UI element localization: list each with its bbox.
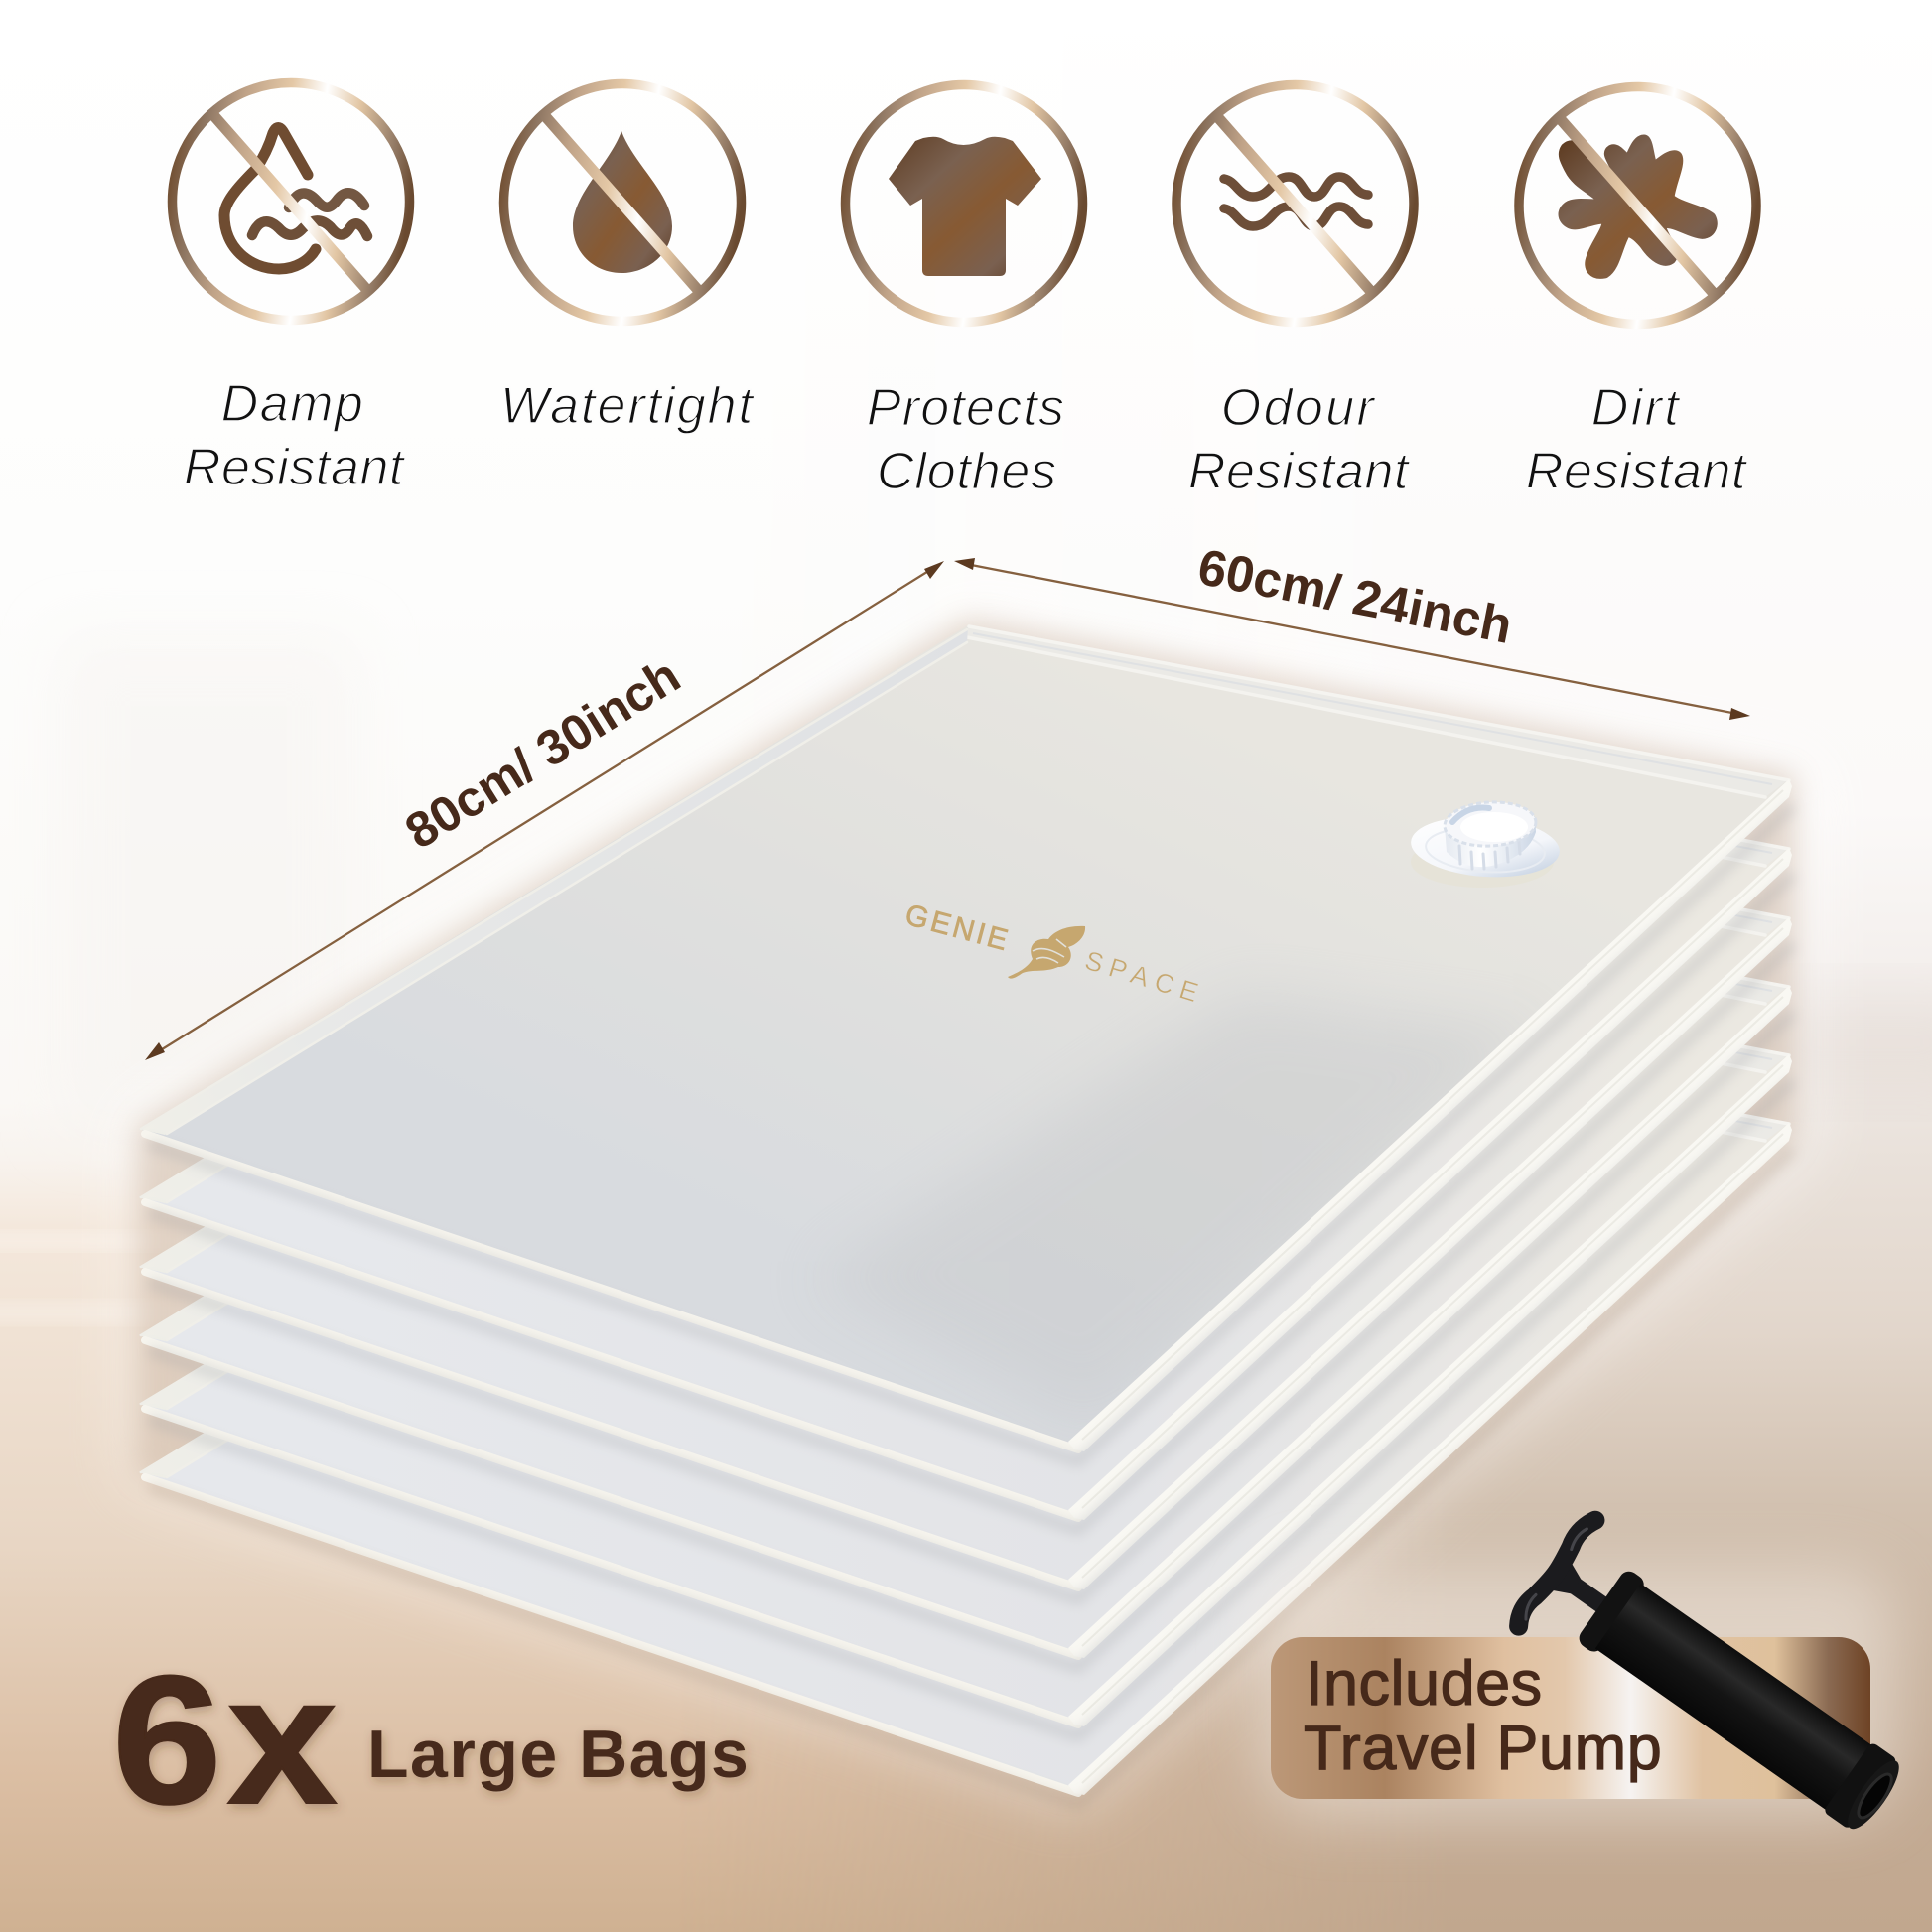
callout: includes travel pump: Travel Pump (1304, 1714, 1662, 1783)
icon: damp resistant (173, 83, 409, 320)
heading: 6x large bags: 6x (112, 1638, 343, 1842)
top bag (139, 625, 1793, 1461)
feature label: protects clothes: Clothes (877, 443, 1057, 500)
feature label: watertight: Watertight (500, 377, 756, 435)
icon: watertight (504, 83, 741, 322)
bag 3 (139, 763, 1793, 1599)
feature label: odour resistant: Resistant (1188, 443, 1411, 500)
icon: odour resistant (1176, 85, 1414, 322)
bag logo (901, 898, 1208, 1010)
glow behind pump callout (1261, 1569, 1896, 1817)
background (0, 649, 1932, 1932)
bag 2 (139, 694, 1793, 1530)
callout: includes travel pump (1271, 1637, 1870, 1799)
heading: 6x large bags (112, 1638, 750, 1842)
arrow: length dimension (145, 561, 944, 1060)
bag stack: lower five bags (139, 694, 1793, 1805)
glow behind bag stack (129, 606, 1817, 1807)
feature label: odour resistant (1188, 379, 1411, 500)
callout: includes travel pump: Includes (1306, 1649, 1543, 1719)
feature label: protects clothes (867, 379, 1065, 500)
feature label: dirt resistant (1526, 379, 1748, 500)
travel pump (1513, 1515, 1921, 1856)
bag logo: SPACE (1081, 945, 1208, 1010)
feature label: dirt resistant: Resistant (1526, 443, 1748, 500)
feature label: protects clothes: Protects (867, 379, 1065, 437)
icon: protects clothes (846, 85, 1082, 322)
feature label: dirt resistant: Dirt (1591, 379, 1681, 437)
feature label: odour resistant: Odour (1221, 379, 1377, 437)
label: 80cm / 30inch: 80cm/ 30inch (396, 647, 690, 860)
bag 5 (139, 900, 1793, 1736)
heading: 6x large bags: Large Bags (367, 1717, 750, 1792)
bag 4 (139, 832, 1793, 1668)
arrow: width dimension (954, 558, 1750, 720)
bag 6 (139, 969, 1793, 1805)
label: 60cm / 24inch: 60cm/ 24inch (1193, 538, 1517, 654)
feature label: damp resistant (184, 375, 406, 496)
valve (1409, 800, 1562, 888)
icon: dirt resistant (1519, 87, 1756, 324)
bag logo: GENIE (901, 898, 1014, 958)
feature label: damp resistant: Damp (221, 375, 364, 433)
feature label: damp resistant: Resistant (184, 439, 406, 496)
